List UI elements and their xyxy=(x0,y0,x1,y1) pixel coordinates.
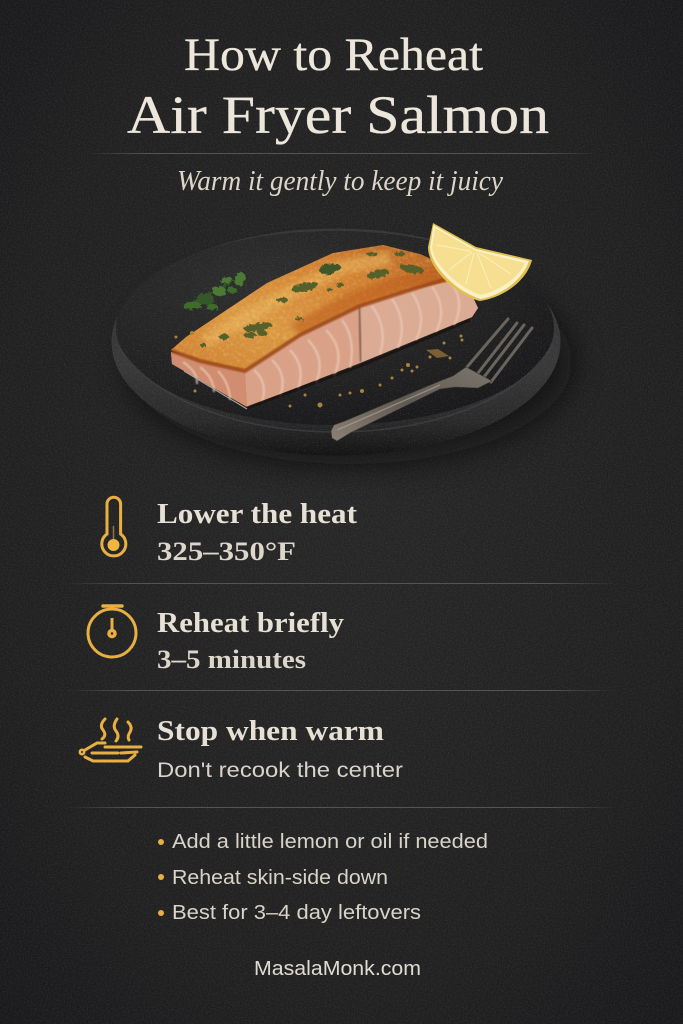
icon: timer xyxy=(88,606,136,657)
text: Don't recook the center xyxy=(157,759,403,782)
illustration: salmon on a plate xyxy=(110,223,572,464)
bullet text: Best for 3–4 day leftovers xyxy=(172,902,421,924)
step 3: stop when warm xyxy=(80,715,403,782)
text: 3–5 minutes xyxy=(157,645,306,674)
title xyxy=(127,29,549,145)
title: How to Reheat xyxy=(184,29,483,81)
icon: steaming plate xyxy=(80,719,141,761)
bullet dots xyxy=(158,839,164,916)
step 2: reheat briefly xyxy=(88,606,345,674)
plate xyxy=(110,225,562,457)
icon: thermometer xyxy=(102,497,126,556)
text: 325–350°F xyxy=(157,537,296,566)
text xyxy=(157,607,345,674)
salmon side flesh xyxy=(171,274,478,409)
lemon wedge xyxy=(428,223,532,301)
footer: website: MasalaMonk.com xyxy=(254,958,421,980)
title: Air Fryer Salmon xyxy=(127,85,549,145)
tips list xyxy=(158,831,488,924)
parsley garnish xyxy=(182,271,247,311)
text xyxy=(157,715,403,782)
text: Reheat briefly xyxy=(157,607,345,639)
bullet text: Add a little lemon or oil if needed xyxy=(172,831,488,853)
salmon crust xyxy=(170,245,448,374)
bullet text xyxy=(172,831,488,924)
subtitle: Warm it gently to keep it juicy xyxy=(177,165,503,197)
text xyxy=(157,498,357,566)
text: Stop when warm xyxy=(157,715,384,747)
herb flecks xyxy=(200,252,425,347)
fork xyxy=(331,319,532,441)
bullet text: Reheat skin-side down xyxy=(172,867,388,889)
step 1: lower the heat xyxy=(102,497,357,566)
text: Lower the heat xyxy=(157,498,357,530)
crumbs xyxy=(174,331,464,408)
